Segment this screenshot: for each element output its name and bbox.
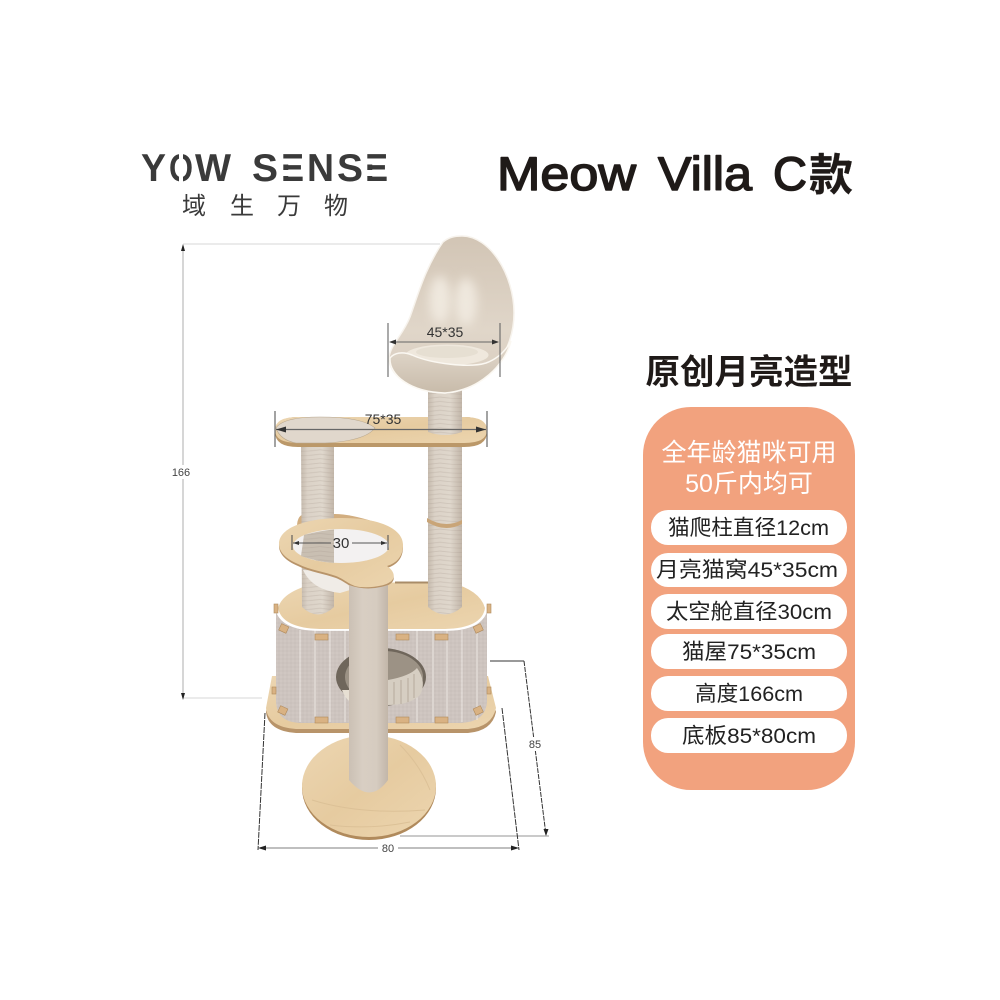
spec: 猫屋75*35cm: 猫屋75*35cm <box>682 640 816 664</box>
spec: 猫爬柱直径12cm: 猫爬柱直径12cm <box>668 516 829 540</box>
house top board <box>278 582 485 629</box>
logo: YOW SENSE 域生万物: N <box>307 147 334 190</box>
logo: YOW SENSE 域生万物: 域 <box>182 193 206 220</box>
spec: 高度166cm: 高度166cm <box>695 682 803 706</box>
dimension: height 166: 166 <box>172 467 190 479</box>
dimension: width 80: 80 <box>382 843 394 855</box>
spec: 高度166cm <box>651 676 847 711</box>
spec: 底板85*80cm: 底板85*80cm <box>682 724 816 748</box>
logo: YOW SENSE 域生万物: 物 <box>324 193 348 220</box>
spec: 猫爬柱直径12cm <box>651 510 847 545</box>
logo: YOW SENSE 域生万物: O <box>169 147 193 190</box>
back right scratching post <box>427 440 462 614</box>
logo: YOW SENSE 域生万物: S <box>252 147 278 190</box>
capsule ring back edge <box>297 514 375 532</box>
dimension: 45*35 <box>388 323 500 377</box>
subtitle: 原创月亮造型: 原创月亮造型 <box>646 344 852 394</box>
dimension: depth 85 <box>400 661 549 836</box>
front scratching post <box>349 585 388 792</box>
logo: YOW SENSE 域生万物: E <box>365 147 388 190</box>
dimension: 75*35: 75*35 <box>365 411 402 427</box>
title: Meow <box>497 147 637 200</box>
floor disc <box>302 735 436 840</box>
spec: 月亮猫窝45*35cm: 月亮猫窝45*35cm <box>656 558 838 582</box>
space capsule bowl and ring <box>279 518 403 593</box>
base plate <box>266 676 496 733</box>
dimension: depth 85: 85 <box>529 739 541 751</box>
bed lower shell <box>390 341 511 393</box>
logo: YOW SENSE 域生万物: Y <box>141 147 166 190</box>
dimension: height 166 <box>172 244 440 700</box>
title: Villa <box>658 147 753 200</box>
dimension: 75*35 <box>275 411 487 447</box>
logo: YOW SENSE 域生万物: E <box>281 147 304 190</box>
logo: YOW SENSE 域生万物 <box>141 147 388 220</box>
dimension: width 80 <box>258 708 519 855</box>
logo: YOW SENSE 域生万物: 生 <box>230 193 254 220</box>
capsule opening <box>293 529 389 563</box>
panel heading: 50斤内均可 <box>685 470 813 498</box>
dimension: 30 <box>292 535 388 552</box>
dimension: 30: 30 <box>333 535 349 552</box>
logo: YOW SENSE 域生万物: S <box>337 147 363 190</box>
post band <box>427 518 462 528</box>
house walls <box>276 608 487 723</box>
spec: 月亮猫窝45*35cm <box>651 553 847 587</box>
dimension: 45*35: 45*35 <box>427 324 464 340</box>
logo: YOW SENSE 域生万物: 万 <box>277 193 301 220</box>
bed cushion <box>405 344 489 366</box>
spec: 太空舱直径30cm <box>651 594 847 629</box>
title: C <box>773 147 807 200</box>
panel: specifications <box>643 407 855 790</box>
panel heading <box>661 439 837 498</box>
title: 款 <box>809 151 853 200</box>
moon cat bed <box>389 236 514 393</box>
spec: 太空舱直径30cm: 太空舱直径30cm <box>666 600 832 624</box>
spec: 底板85*80cm <box>651 718 847 753</box>
panel heading: 全年龄猫咪可用 <box>661 439 837 467</box>
logo: YOW SENSE 域生万物: W <box>195 147 231 190</box>
back left scratching post <box>301 440 334 614</box>
platform cushion disc <box>276 417 375 443</box>
moon bed support post <box>428 388 462 435</box>
spec: 猫屋75*35cm <box>651 634 847 669</box>
wooden joint tabs <box>272 604 491 723</box>
top platform <box>275 417 487 447</box>
title <box>497 147 853 200</box>
house entrance hole <box>336 648 426 706</box>
